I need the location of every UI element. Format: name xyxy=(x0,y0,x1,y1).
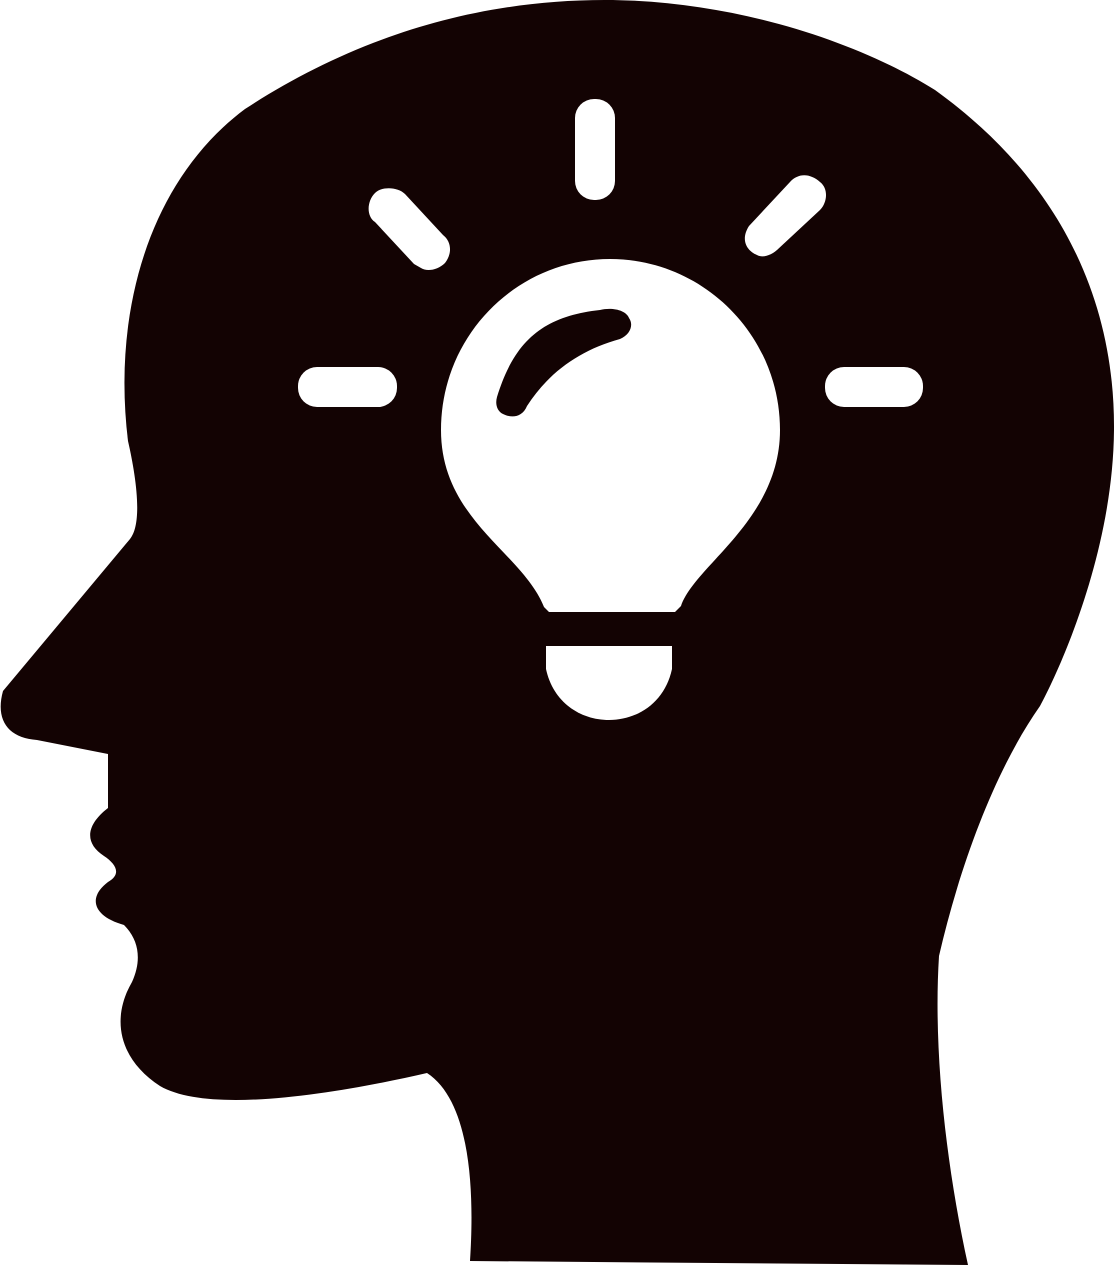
ray: left xyxy=(298,367,397,407)
light bulb xyxy=(441,259,780,720)
bulb highlight xyxy=(496,309,631,416)
ray: top xyxy=(575,99,615,200)
bulb base xyxy=(546,646,672,720)
bulb glass xyxy=(441,259,780,612)
ray: upper right xyxy=(745,175,826,256)
ray: upper left xyxy=(369,188,450,270)
ray: right xyxy=(825,367,923,407)
light rays xyxy=(298,99,923,407)
